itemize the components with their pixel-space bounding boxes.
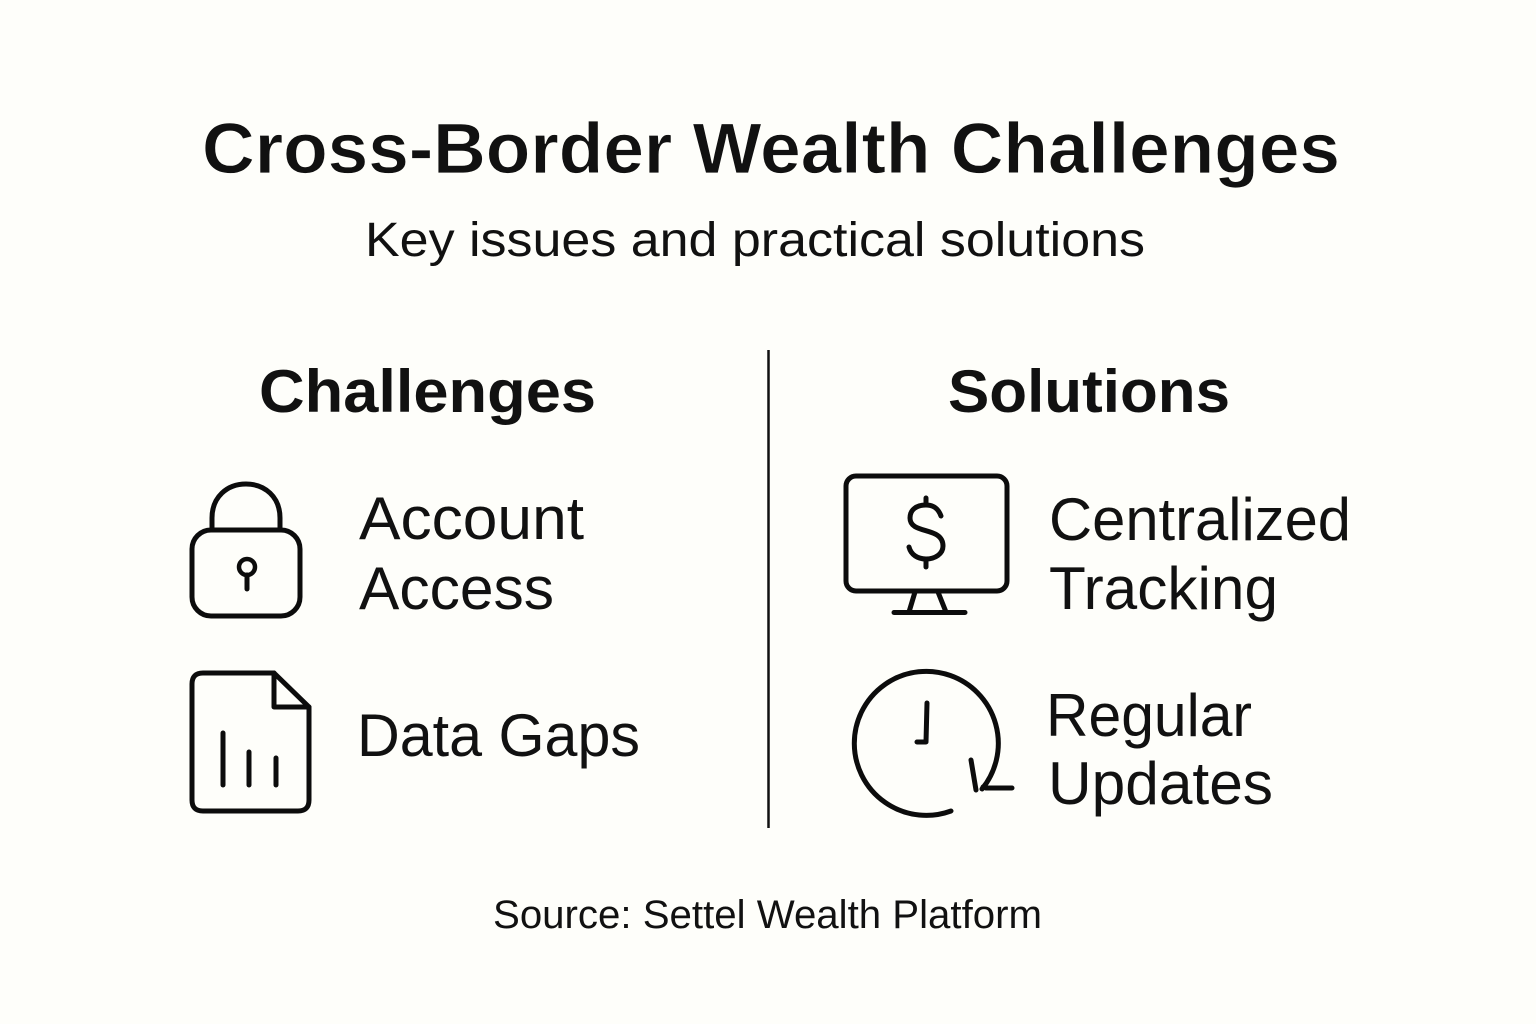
heading: solutions: Solutions [948, 358, 1230, 425]
label: centralized tracking: Tracking [1049, 555, 1278, 622]
label: account access: Account [359, 485, 584, 552]
label: regular updates: Updates [1048, 750, 1273, 817]
panel: solutions [846, 358, 1351, 817]
icon: document with bars [192, 673, 309, 811]
panel: challenges [192, 358, 640, 811]
label: centralized tracking: Centralized [1049, 486, 1351, 553]
icon: padlock [192, 484, 300, 616]
icon: monitor with dollar sign [846, 476, 1007, 612]
label: account access: Access [359, 555, 554, 622]
divider [767, 350, 770, 828]
heading: challenges: Challenges [259, 358, 596, 425]
source note: Source: Settel Wealth Platform [493, 893, 1042, 937]
title: Cross-Border Wealth Challenges [202, 110, 1340, 189]
label: data gaps: Data Gaps [357, 702, 640, 769]
label: regular updates: Regular [1046, 682, 1252, 749]
icon: clock with arrow [854, 671, 1012, 815]
subtitle: Key issues and practical solutions [365, 214, 1145, 267]
